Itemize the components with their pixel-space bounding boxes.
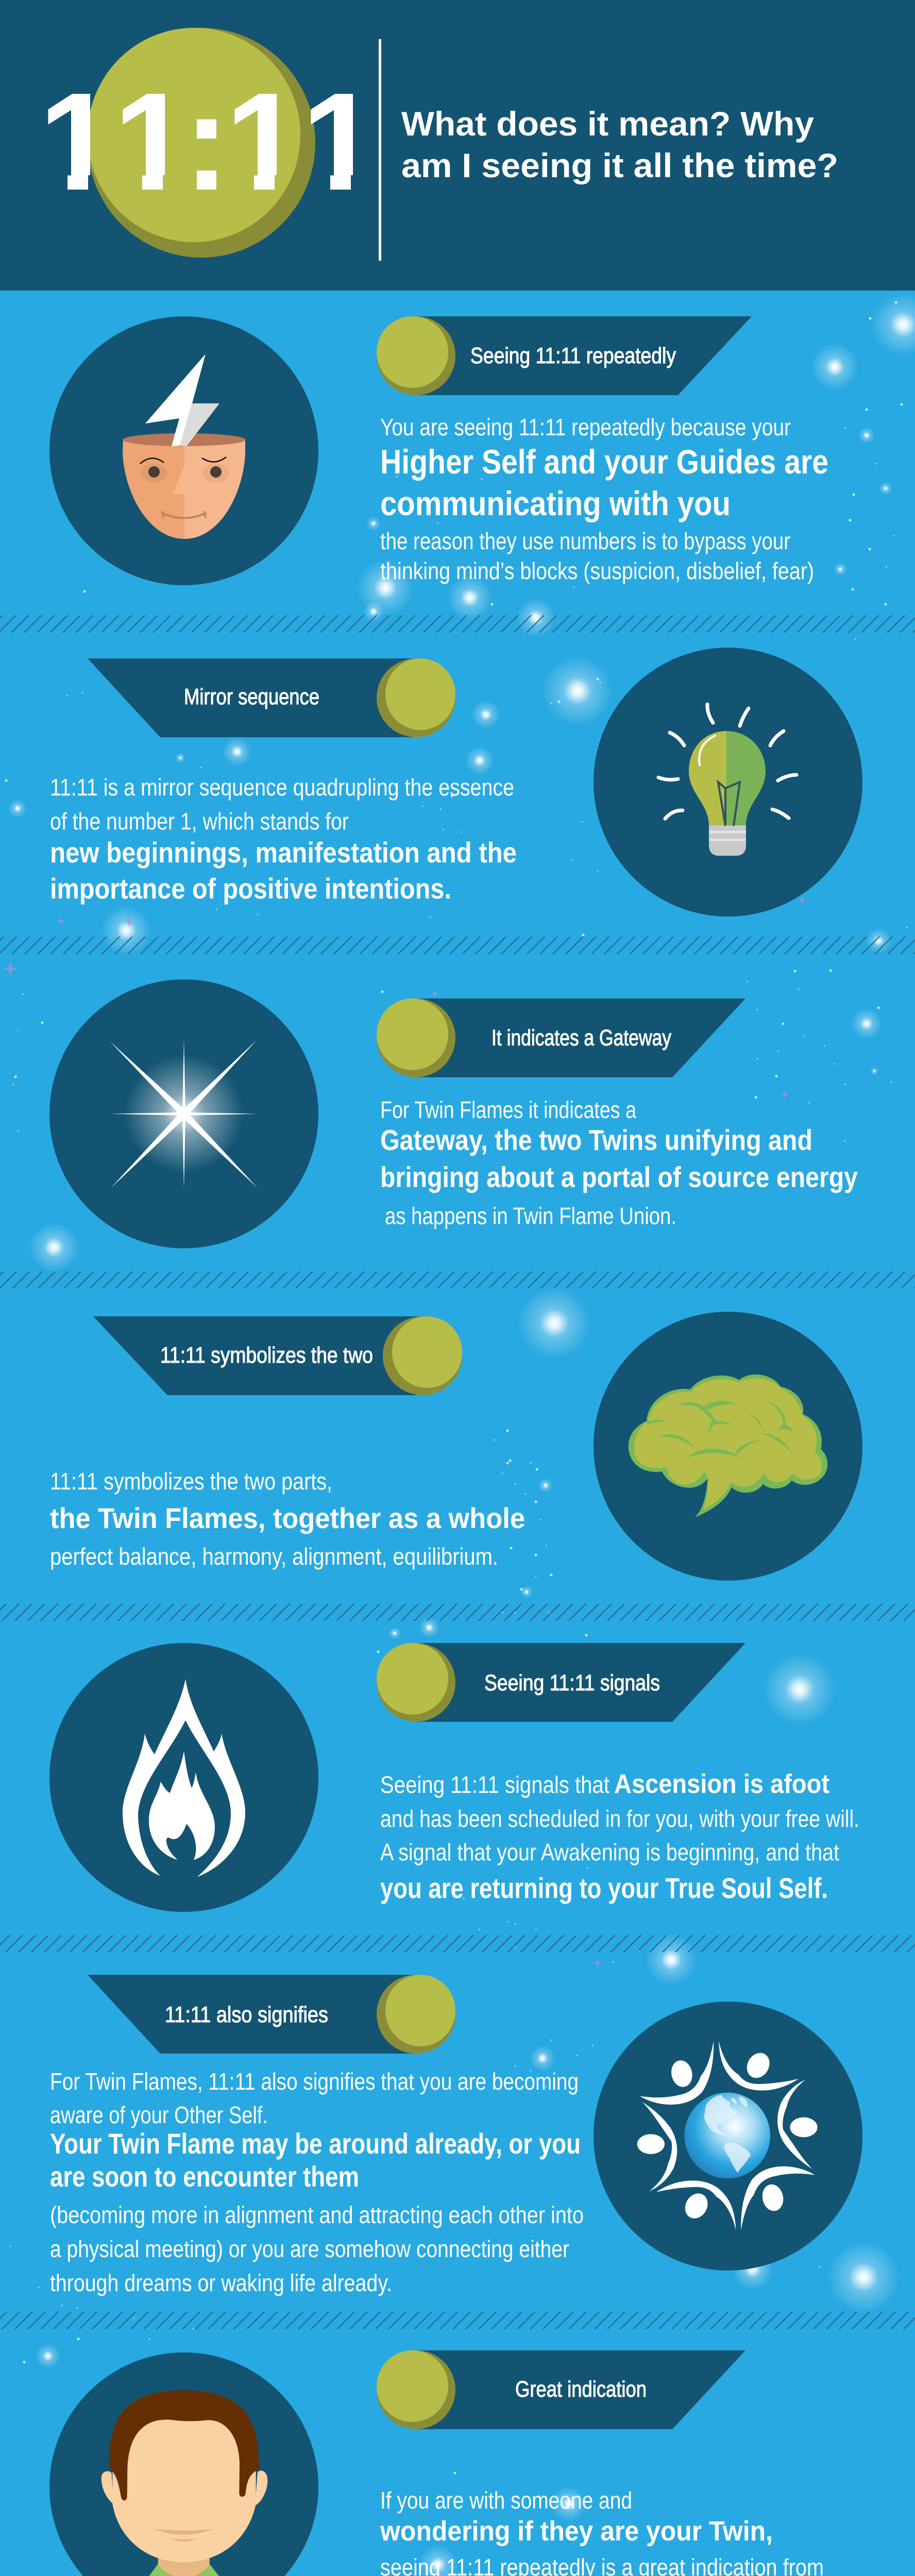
icon: header disc [88, 28, 315, 258]
banner [377, 1643, 745, 1722]
body text: importance of positive intentions. [50, 872, 451, 905]
icon: flame [49, 1643, 318, 1912]
body text: Seeing 11:11 signals that [380, 1771, 609, 1798]
body text: A signal that your Awakening is beginning, and that [380, 1839, 839, 1866]
body text: aware of your Other Self. [50, 2102, 268, 2128]
banner: 11:11 symbolizes the two [160, 1343, 373, 1368]
body text [50, 1468, 525, 1570]
icon: brain speech bubble [594, 1312, 862, 1581]
body text: thinking mind’s blocks (suspicion, disbelief, fear) [380, 557, 814, 584]
banner: It indicates a Gateway [492, 1025, 671, 1050]
body text: For Twin Flames, 11:11 also signifies that you are becoming [50, 2068, 579, 2095]
body text [380, 1769, 859, 1904]
body text: a physical meeting) or you are somehow connecting either [50, 2235, 569, 2262]
icon: light bulb [594, 648, 862, 917]
body text [380, 414, 828, 584]
banner [88, 658, 455, 737]
body text [50, 2068, 584, 2296]
body text [50, 774, 517, 905]
body text: Your Twin Flame may be around already, or you [50, 2127, 581, 2160]
title question: What does it mean? Why [401, 105, 814, 143]
body text: You are seeing 11:11 repeatedly because your [380, 414, 791, 440]
body text: Gateway, the two Twins unifying and [380, 1124, 812, 1156]
title question [401, 105, 838, 184]
body text: are soon to encounter them [50, 2160, 359, 2193]
banner: Great indication [515, 2377, 647, 2402]
icon: star burst [49, 979, 318, 1248]
body text: (becoming more in alignment and attracting each other into [50, 2201, 584, 2228]
divider line [379, 39, 381, 261]
body text: communicating with you [380, 484, 731, 522]
banner: Mirror sequence [184, 684, 319, 709]
body text [380, 2487, 824, 2576]
panel: symbolizes the two [50, 1312, 862, 1581]
body text: For Twin Flames it indicates a [380, 1096, 636, 1123]
icon: people around globe [594, 2002, 862, 2270]
body text: of the number 1, which stands for [50, 808, 349, 835]
body text: through dreams or waking life already. [50, 2269, 392, 2296]
banner: Seeing 11:11 signals [484, 1670, 660, 1696]
banner [93, 1316, 462, 1395]
body text: 11:11 symbolizes the two parts, [50, 1468, 332, 1495]
panel: great indication [49, 2350, 824, 2576]
body text: If you are with someone and [380, 2487, 632, 2514]
body text: as happens in Twin Flame Union. [385, 1202, 676, 1229]
diagonal hatch dividers [0, 615, 915, 2576]
title number: 11:11 [39, 64, 379, 219]
body text: new beginnings, manifestation and the [50, 836, 517, 869]
panel: mirror sequence [50, 648, 862, 917]
body text [380, 1096, 858, 1229]
panel: seeing 11:11 signals [49, 1643, 859, 1912]
body text: 11:11 is a mirror sequence quadrupling the essence [50, 774, 514, 801]
banner [377, 316, 752, 395]
panel: seeing 11:11 repeatedly [49, 316, 828, 585]
icon: man avatar [49, 2352, 318, 2576]
panel: also signifies [50, 1975, 862, 2296]
body text: perfect balance, harmony, alignment, equilibrium. [50, 1543, 498, 1570]
body text: Ascension is afoot [614, 1769, 829, 1799]
body text: Higher Self and your Guides are [380, 443, 828, 481]
banner [377, 2350, 745, 2429]
panel: header [0, 0, 915, 291]
body text: the reason they use numbers is to bypass your [380, 528, 790, 554]
body text: the Twin Flames, together as a whole [50, 1502, 525, 1534]
banner [377, 998, 745, 1077]
panel: gateway [49, 979, 858, 1248]
banner [88, 1975, 455, 2054]
banner: 11:11 also signifies [165, 2002, 328, 2027]
banner: Seeing 11:11 repeatedly [470, 343, 676, 368]
body text: wondering if they are your Twin, [380, 2516, 773, 2547]
icon: head with lightning [49, 316, 318, 585]
title question: am I seeing it all the time? [401, 146, 838, 184]
